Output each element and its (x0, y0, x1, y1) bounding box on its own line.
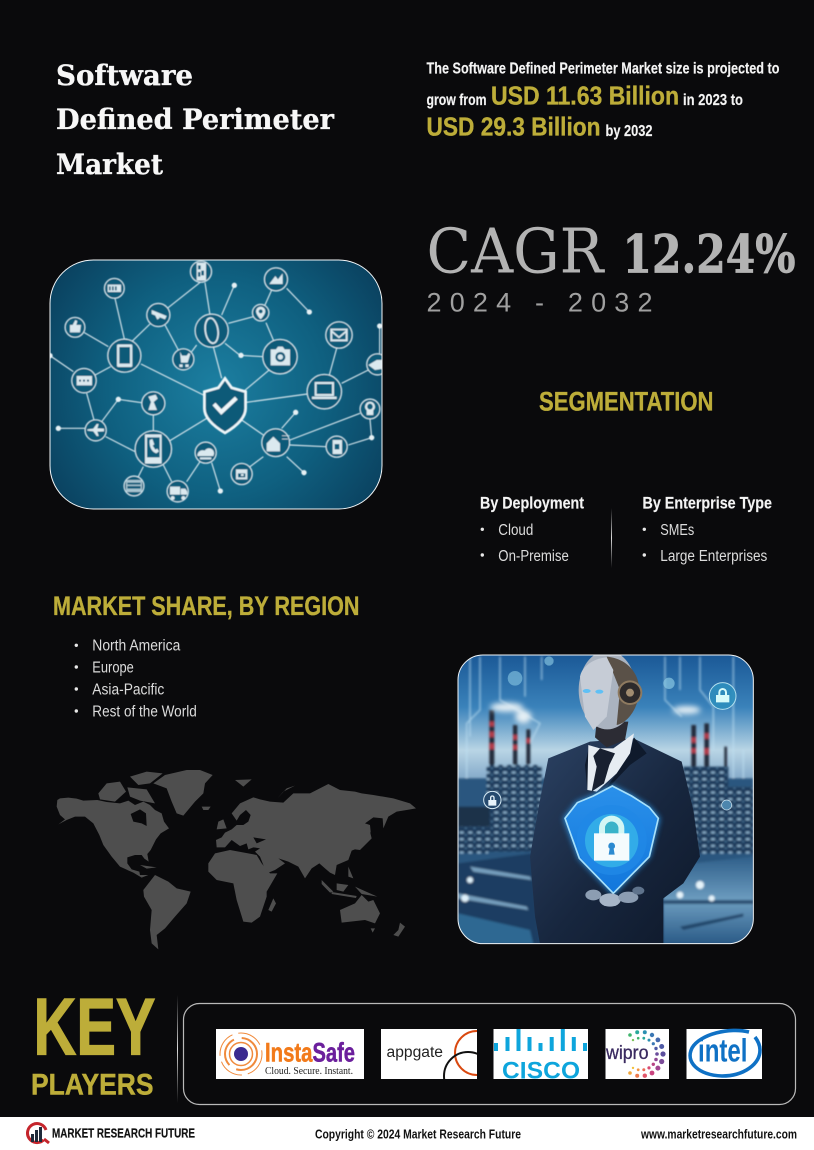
region list: Asia-Pacific (92, 682, 165, 698)
title (56, 59, 335, 181)
stack stripes (489, 722, 709, 754)
ground left (458, 853, 536, 928)
footer bar (0, 1117, 814, 1150)
footer brand name: MARKET RESEARCH FUTURE (52, 1125, 195, 1140)
segment list: by enterprise type (642, 494, 772, 565)
key players heading: PLAYERS (31, 1068, 154, 1101)
smoke (490, 703, 701, 723)
glowing shield with padlock (563, 785, 660, 895)
logo: Wipro: wipro (605, 1043, 648, 1064)
key players panel (184, 1004, 796, 1104)
segment list: by deployment: Cloud (498, 522, 533, 539)
title: Market (56, 148, 163, 181)
heading: segmentation: SEGMENTATION (539, 386, 714, 416)
market size statement: USD 11.63 Billion (491, 80, 679, 110)
head (579, 651, 641, 730)
segment list: by enterprise type: Large Enterprises (660, 548, 768, 565)
market size statement: USD 29.3 Billion (426, 112, 600, 142)
world map (57, 770, 416, 949)
key players divider (177, 995, 178, 1103)
market size statement (426, 60, 780, 142)
footer copyright: Copyright © 2024 Market Research Future (315, 1127, 521, 1141)
background scene (458, 657, 753, 944)
segment list: by enterprise type: SMEs (660, 522, 695, 539)
image: robot businessman with security shield (458, 651, 753, 944)
ground right (663, 857, 753, 944)
logo: Wipro (605, 1029, 669, 1079)
factory city (458, 778, 753, 865)
heading: market share by region: MARKET SHARE, BY REGION (53, 591, 360, 621)
region list: Europe (92, 659, 134, 676)
forecast period: 2024 - 2032 (426, 288, 652, 318)
key players heading: KEY (34, 982, 156, 1072)
footer logo icon (28, 1124, 49, 1143)
jewelled hands (585, 887, 644, 907)
shirt (587, 733, 634, 792)
network links (50, 282, 380, 491)
CAGR figure (426, 214, 796, 288)
title: Defined Perimeter (56, 103, 335, 136)
image: network security shield (47, 260, 388, 509)
floating lock badges (484, 656, 736, 810)
segment list: by deployment: On-Premise (498, 548, 569, 565)
logo: Cisco (494, 1029, 588, 1084)
logo: appgate: appgate (386, 1044, 443, 1061)
segmentation divider (611, 508, 612, 568)
neck (595, 722, 628, 747)
CAGR figure: CAGR (426, 214, 606, 288)
jacket lapels (585, 738, 646, 790)
smokestacks (489, 710, 727, 772)
logo: Intel (686, 1029, 762, 1079)
market size statement: grow from (426, 92, 486, 109)
tie (592, 748, 615, 792)
central shield (204, 378, 246, 433)
logo: Cisco: CISCO (502, 1058, 580, 1084)
logo: InstaSafe: Safe (312, 1038, 355, 1068)
logo: InstaSafe: Cloud. Secure. Instant. (265, 1066, 353, 1077)
suit jacket (530, 738, 700, 944)
segment list: by enterprise type: By Enterprise Type (642, 494, 772, 512)
logo: appgate (381, 1029, 477, 1079)
logo: Intel: intel (698, 1032, 748, 1068)
network nodes (65, 261, 388, 502)
key players heading (31, 982, 156, 1101)
logo: InstaSafe (216, 1029, 364, 1079)
region list: Rest of the World (92, 704, 197, 721)
market size statement: by 2032 (606, 123, 652, 140)
ring wearable glyph (204, 317, 220, 344)
region list: North America (92, 638, 181, 655)
market size statement: in 2023 to (683, 92, 743, 109)
region list (75, 638, 197, 721)
title: Software (56, 59, 193, 92)
segment list: by deployment (480, 494, 584, 565)
segment list: by deployment: By Deployment (480, 494, 584, 512)
logo: InstaSafe: Insta (265, 1038, 313, 1068)
node glyphs (70, 263, 385, 500)
circuit traces (464, 656, 746, 780)
network end dots (47, 283, 382, 494)
